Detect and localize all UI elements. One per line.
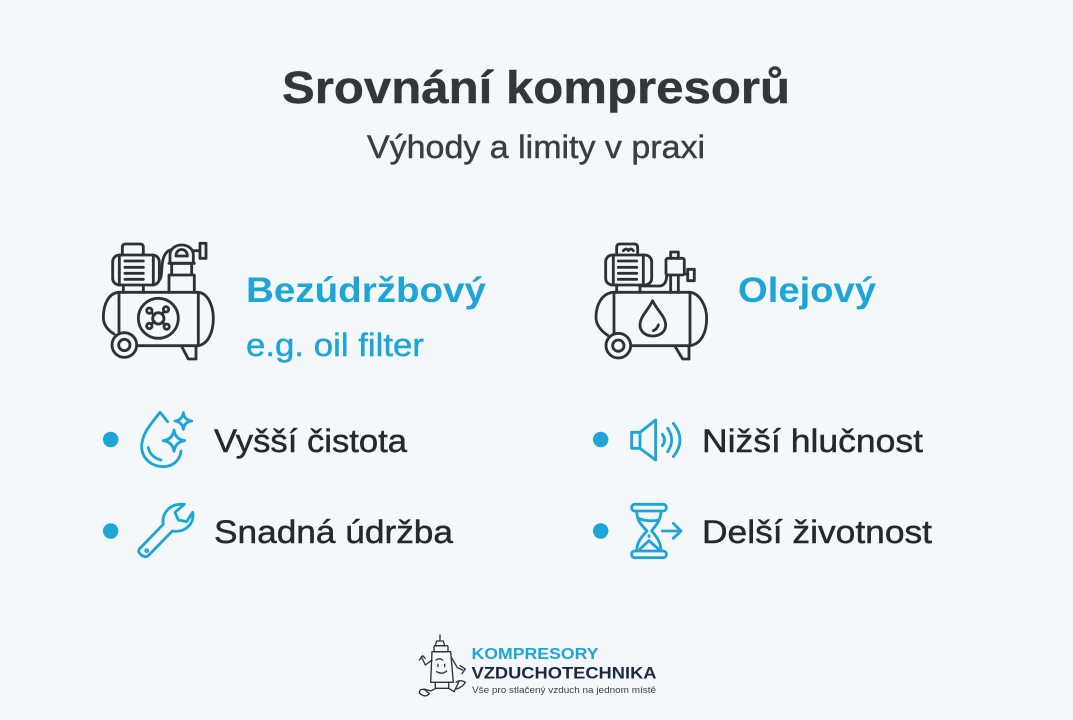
heading: Olejový: Olejový: [738, 271, 877, 310]
subheading: e.g. oil filter: e.g. oil filter: [246, 327, 424, 363]
label: Nižší hlučnost: [702, 423, 923, 459]
bullet: [103, 432, 118, 447]
panel: Bezúdržbový: [103, 243, 487, 363]
logo: [419, 635, 656, 696]
title: Srovnání kompresorů: [282, 62, 790, 113]
list item: Vyšší čistota: [103, 412, 407, 467]
bullet: [103, 523, 118, 539]
icon: sparkling water drop: [142, 412, 192, 467]
label: Snadná údržba: [214, 514, 453, 550]
icon: wrench: [139, 504, 193, 557]
logo mascot: [419, 635, 465, 696]
logo name: Vzduchotechnika: VZDUCHOTECHNIKA: [472, 664, 656, 682]
logo name: Kompresory: KOMPRESORY: [472, 646, 599, 663]
panel: Olejový: [596, 244, 877, 359]
heading: Bezúdržbový: Bezúdržbový: [246, 271, 487, 310]
icon: speaker: [632, 420, 680, 460]
label: Delší životnost: [702, 514, 932, 550]
icon: oil compressor with drop: [596, 244, 707, 359]
bullet: [593, 523, 608, 539]
list item: Delší životnost: [593, 504, 932, 558]
label: Vyšší čistota: [214, 423, 407, 459]
bullet: [593, 432, 608, 447]
list item: Nižší hlučnost: [593, 420, 923, 460]
logo tagline: Vše pro stlačený vzduch na jednom místě: [472, 685, 656, 696]
icon: hourglass with arrow: [632, 504, 681, 558]
list item: Snadná údržba: [103, 504, 453, 557]
subtitle: Výhody a limity v praxi: [367, 129, 705, 165]
icon: oil-free compressor with fan: [103, 243, 213, 359]
